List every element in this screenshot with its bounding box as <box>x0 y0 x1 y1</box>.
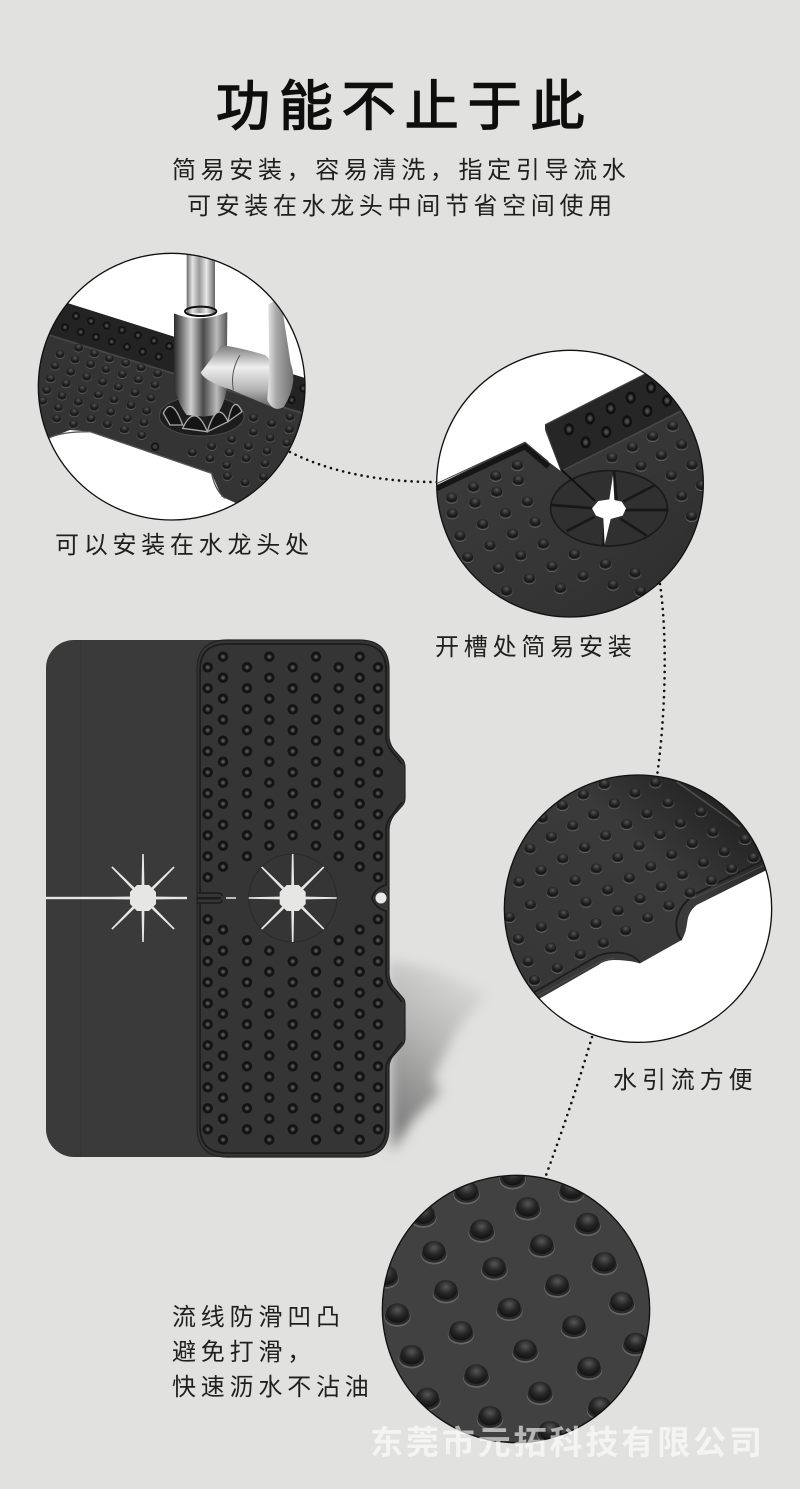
dotted connector: slot circle to drain circle <box>657 584 665 776</box>
upper bump columns <box>202 652 383 882</box>
title: 功能不止于此 <box>216 77 593 137</box>
panel: drainage edge circle <box>500 770 780 1042</box>
icon: cut-out star on back sheet <box>99 854 187 942</box>
panel: front mat with bumps <box>197 640 405 1157</box>
icon: hanging hole <box>376 892 386 904</box>
dotted connector: faucet circle to slot circle <box>290 452 437 482</box>
caption: anti-slip bumps: 快速沥水不沾油 <box>172 1374 374 1401</box>
caption: anti-slip bumps <box>172 1304 374 1401</box>
icon: cut-out star on front mat <box>249 854 337 942</box>
subtitle text <box>172 157 630 220</box>
caption: anti-slip bumps: 避免打滑， <box>172 1339 316 1366</box>
caption: easy drainage: 水引流方便 <box>613 1067 758 1094</box>
panel: back sheet of mat <box>46 640 276 1157</box>
subtitle text: 可安装在水龙头中间节省空间使用 <box>187 193 617 220</box>
caption: anti-slip bumps: 流线防滑凹凸 <box>172 1304 345 1331</box>
watermark: 东莞市元拓科技有限公司 <box>370 1424 765 1461</box>
panel: slot installation circle <box>436 350 704 618</box>
caption: slot installation: 开槽处简易安装 <box>435 634 637 661</box>
caption: faucet installation: 可以安装在水龙头处 <box>55 532 314 559</box>
subtitle text: 简易安装，容易清洗，指定引导流水 <box>172 157 630 184</box>
panel: anti-slip bump close-up circle <box>372 1166 650 1444</box>
shadow under mat <box>388 960 487 1152</box>
dotted connector: drain circle to bump circle <box>545 1037 592 1178</box>
lower bump columns <box>202 914 383 1145</box>
panel: faucet installation circle <box>38 252 306 521</box>
